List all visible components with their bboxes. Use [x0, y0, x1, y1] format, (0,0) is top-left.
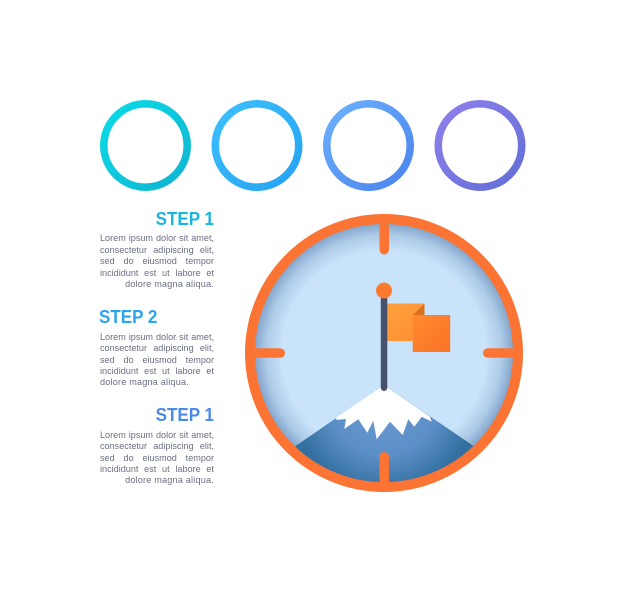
mountain	[295, 388, 474, 482]
text block 2: incididunt est ut labore et	[100, 366, 214, 376]
text block 1: incididunt est ut labore et	[100, 268, 214, 278]
ring 4	[438, 104, 522, 187]
snow cap	[336, 385, 432, 439]
text block 3: dolore magna aliqua.	[125, 475, 214, 485]
dial outer ring	[250, 219, 518, 487]
heading: step 1 repeated: STEP 1	[156, 404, 214, 425]
text block 1: consectetur adipiscing elit,	[100, 245, 214, 255]
text block 3: incididunt est ut labore et	[100, 464, 214, 474]
text block 2: sed do eiusmod tempor	[100, 355, 214, 365]
text block 1: Lorem ipsum dolor sit amet,	[100, 233, 214, 243]
text block 2: dolore magna aliqua.	[100, 377, 189, 387]
target dial	[250, 219, 518, 500]
text block 3: Lorem ipsum dolor sit amet,	[100, 430, 214, 440]
text block 3: consectetur adipiscing elit,	[100, 441, 214, 451]
text block 3: sed do eiusmod tempor	[100, 453, 214, 463]
text block 2	[100, 332, 214, 387]
text block 1	[100, 233, 214, 289]
text block 2: Lorem ipsum dolor sit amet,	[100, 332, 214, 342]
dial ticks	[252, 222, 516, 485]
ring 1	[104, 104, 187, 187]
graphics: rings and target illustration	[100, 100, 526, 492]
heading: step 2: STEP 2	[99, 306, 157, 327]
text block 1: dolore magna aliqua.	[125, 279, 214, 289]
text block 2: consectetur adipiscing elit,	[100, 343, 214, 353]
ring 2	[215, 104, 299, 187]
heading: step 1: STEP 1	[156, 208, 214, 229]
ring 3	[327, 104, 410, 187]
text block 3	[100, 430, 214, 485]
flag	[376, 282, 450, 391]
text block 1: sed do eiusmod tempor	[100, 256, 214, 266]
